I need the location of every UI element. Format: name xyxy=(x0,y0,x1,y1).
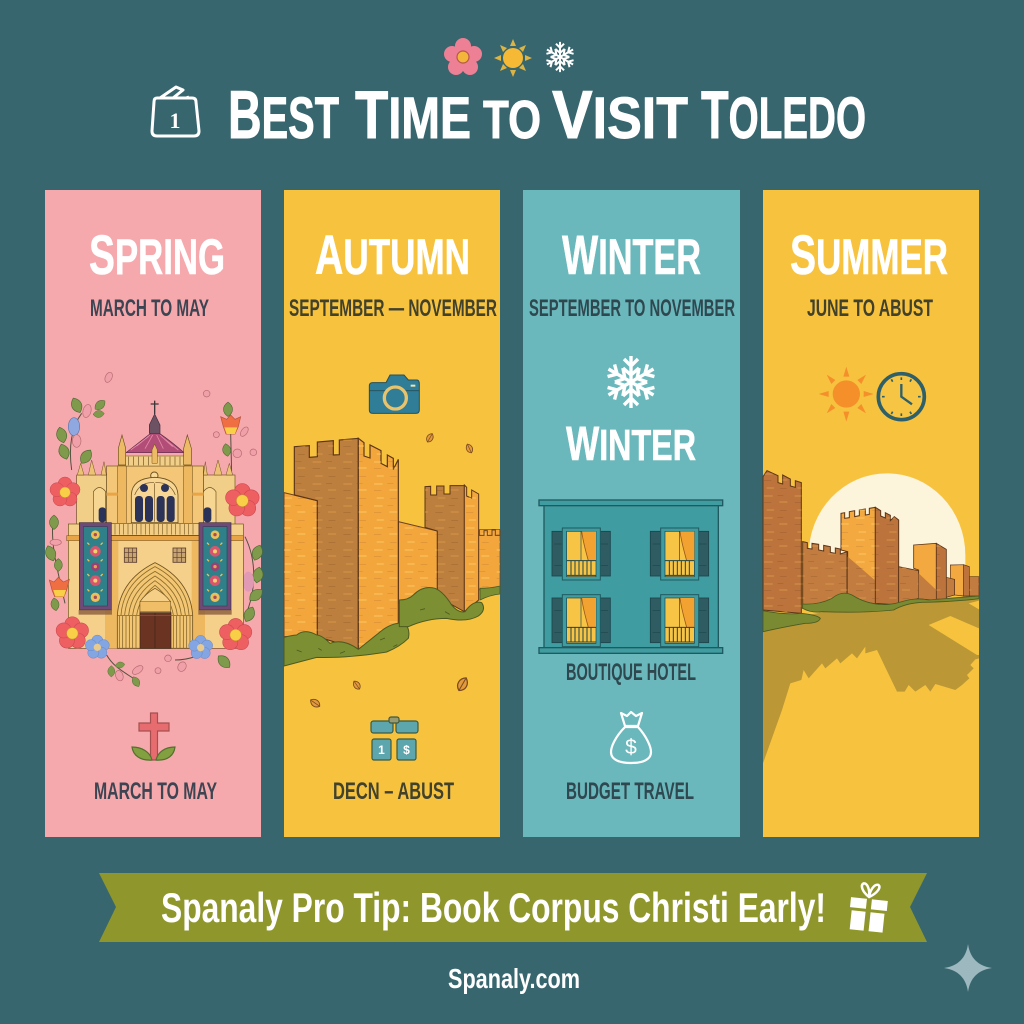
vines xyxy=(52,413,254,678)
banner: pro tip xyxy=(99,873,927,942)
big windows xyxy=(131,477,178,523)
subtitle: summer dates: JUNE TO ABUST xyxy=(807,295,933,322)
title: BEST xyxy=(228,77,339,153)
walls xyxy=(284,493,317,637)
icon: money bag: $ xyxy=(625,736,637,759)
icon: snowflake xyxy=(545,42,575,72)
caption: spring bottom: MARCH TO MAY xyxy=(94,778,217,805)
icon: calendar gift xyxy=(371,717,418,760)
illustration: cathedral with floral wreath xyxy=(43,371,265,688)
wings and lower body xyxy=(77,475,107,525)
icon: camera xyxy=(369,375,419,413)
banner text: Spanaly Pro Tip: Book Corpus Christi Early! xyxy=(161,884,826,931)
title: TOLEDO xyxy=(701,77,866,153)
season icons row xyxy=(444,38,575,77)
title: VISIT xyxy=(552,77,688,153)
heading: summer: SUMMER xyxy=(790,223,948,286)
subtitle: winter dates: SEPTEMBER TO NOVEMBER xyxy=(529,295,735,322)
grid windows xyxy=(124,548,186,562)
caption: autumn bottom: DECN – ABUST xyxy=(333,778,454,805)
panel: summer xyxy=(763,190,979,837)
caption: boutique hotel: BOUTIQUE HOTEL xyxy=(566,659,696,686)
setting sun xyxy=(809,473,965,587)
flowers xyxy=(50,477,80,506)
footer: website: Spanaly.com xyxy=(448,963,580,994)
wall segments xyxy=(803,542,847,608)
illustration: city walls xyxy=(284,375,500,693)
bushes xyxy=(284,623,409,666)
icon: cross with leaves xyxy=(132,713,175,760)
panel: winter xyxy=(523,190,740,837)
title xyxy=(228,77,866,153)
ground shadow xyxy=(763,595,979,763)
panel: autumn xyxy=(284,190,500,837)
falling leaves xyxy=(309,697,322,709)
title: TIME xyxy=(355,77,471,153)
panel: spring xyxy=(43,190,265,837)
heading: winter: WINTER xyxy=(562,223,701,286)
central tower xyxy=(107,466,203,523)
illustration: sunset walls with shadows xyxy=(763,367,979,763)
icon: calendar xyxy=(152,87,199,136)
leaves xyxy=(425,432,435,443)
bushes xyxy=(803,593,979,612)
icon: money bag xyxy=(611,712,651,763)
heading: spring: SPRING xyxy=(89,223,225,286)
roof xyxy=(126,433,184,453)
subtitle: autumn dates: SEPTEMBER — NOVEMBER xyxy=(289,295,497,322)
icon: gift xyxy=(848,882,889,934)
icon: calendar gift: $ xyxy=(403,743,410,757)
icon: snowflake xyxy=(604,356,658,408)
subheading: winter: WINTER xyxy=(566,418,696,471)
portal xyxy=(117,563,193,648)
icon: sun xyxy=(494,39,532,77)
icon: calendar: 1 xyxy=(170,108,180,133)
title: TO xyxy=(483,90,541,150)
icon: sparkle xyxy=(944,944,992,992)
subtitle: spring dates: MARCH TO MAY xyxy=(90,295,209,322)
icon: clock xyxy=(878,374,924,420)
icon: calendar gift: 1 xyxy=(378,743,385,757)
icon: flower xyxy=(444,38,482,75)
caption: budget travel: BUDGET TRAVEL xyxy=(566,778,694,805)
icon: sun xyxy=(819,367,874,422)
balustrade xyxy=(111,523,199,535)
illustration: boutique hotel facade xyxy=(539,500,723,653)
tapestries xyxy=(79,523,112,615)
heading: autumn: AUTUMN xyxy=(315,223,470,286)
